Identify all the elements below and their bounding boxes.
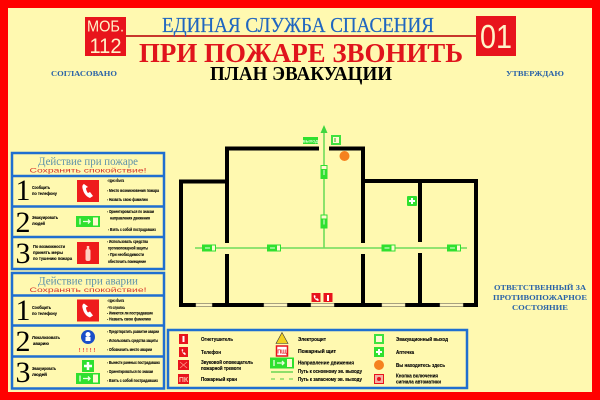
legend: you are here (374, 360, 445, 370)
panel heading: Сохранять спокойствие! (30, 166, 147, 174)
panel heading (30, 156, 147, 174)
step 2: contain the emergency: 2 (16, 325, 30, 358)
legend: reserve exit route (271, 377, 362, 383)
step 3: try to extinguish: 3 (16, 237, 30, 270)
step 3: try to extinguish: обесточить помещение (108, 258, 146, 265)
step 2: evacuate people: направления движения (110, 216, 150, 222)
step 2: contain the emergency: - Обозначить место аварии (107, 346, 152, 353)
step 1: report by phone: - Что случилось (107, 305, 125, 311)
legend: emergency exit (374, 334, 449, 344)
step 2: contain the emergency: !!!!! (79, 348, 97, 354)
legend: you are here: Вы находитесь здесь (396, 363, 445, 369)
walls (179, 146, 478, 307)
legend: direction of movement (270, 358, 354, 368)
step 3: evacuate people: Эвакуировать (32, 366, 56, 372)
legend: automatic alarm button (374, 374, 441, 386)
legend: main exit route: Путь к основному эв. выходу (298, 369, 362, 375)
legend: fire alarm sounder: Звуковой оповещатель (201, 359, 253, 366)
icon: extinguisher on plan (324, 293, 332, 302)
panel heading: Сохранять спокойствие! (30, 286, 147, 294)
label: approved: УТВЕРЖДАЮ (506, 69, 565, 78)
floor plan (179, 125, 478, 307)
legend: electrical panel (276, 332, 326, 344)
legend: fire alarm sounder: пожарной тревоги (201, 365, 241, 372)
legend: fire board (276, 346, 336, 356)
step 3: try to extinguish: - При необходимости (108, 251, 144, 258)
step 3: try to extinguish (16, 237, 148, 270)
step 1: report by phone: - Место возникновения пожара (107, 188, 159, 194)
exit label sign: ВЫХОД (303, 138, 318, 143)
step 1: report by phone: 1 (16, 174, 30, 207)
icon: phone on plan (312, 293, 320, 302)
legend: fire hydrant: Пожарный кран (201, 376, 237, 383)
heading: call in case of fire: ПРИ ПОЖАРЕ ЗВОНИТЬ (139, 38, 463, 68)
legend: extinguisher (179, 334, 233, 344)
legend: reserve exit route: Путь к запасному эв. выходу (298, 377, 362, 383)
step 1: report by phone: - Адрес объекта (107, 297, 124, 304)
badge: mobile 112: 112 (90, 35, 122, 58)
header rule (126, 35, 476, 37)
panel heading (30, 276, 147, 294)
legend: first aid (374, 347, 414, 357)
route signs (202, 165, 461, 252)
step 2: evacuate people (16, 206, 156, 239)
badge: mobile 112: МОБ. (87, 18, 124, 36)
step 2: contain the emergency (16, 325, 159, 358)
legend: main exit route (271, 369, 362, 375)
icon: emergency exit (331, 135, 341, 145)
text block: responsible for fire safety: ПРОТИВОПОЖАРНОЕ (493, 293, 587, 302)
legend: first aid: Аптечка (396, 350, 414, 356)
legend: automatic alarm button: Кнопка включения (396, 374, 438, 380)
text block: responsible for fire safety (493, 283, 587, 312)
legend: emergency exit: Эвакуационный выход (396, 336, 449, 343)
panel: actions in case of fire (12, 153, 164, 270)
legend: fire hydrant (178, 374, 237, 384)
legend: phone: Телефон (201, 349, 221, 356)
legend: fire board: ПЩ (277, 350, 287, 356)
icon: you are here (340, 151, 350, 161)
step 1: report by phone: по телефону (32, 310, 57, 317)
panel heading: Действие при пожаре (38, 156, 138, 168)
heading: unified rescue service: ЕДИНАЯ СЛУЖБА СПАСЕНИЯ (162, 13, 434, 37)
text block: responsible for fire safety: ОТВЕТСТВЕННЫЙ ЗА (494, 283, 587, 292)
step 2: evacuate people: - Взять с собой пострадавших (108, 226, 156, 233)
step 2: contain the emergency: - Предотвратить развитие аварии (107, 329, 159, 335)
step 3: evacuate people: людей (32, 371, 47, 378)
windows (196, 304, 463, 306)
text block: responsible for fire safety: СОСТОЯНИЕ (512, 303, 568, 312)
step 3: evacuate people: - Ориентироваться по знакам (107, 369, 153, 375)
step 2: contain the emergency: Локализовать (32, 335, 60, 341)
step 1: report by phone (16, 294, 153, 327)
legend (168, 330, 467, 388)
heading: evacuation plan: ПЛАН ЭВАКУАЦИИ (210, 64, 392, 85)
legend: automatic alarm button: сигнала автоматики (396, 380, 441, 386)
legend: fire board: Пожарный щит (298, 348, 336, 355)
icon: first aid (407, 196, 417, 206)
step 1: report by phone: - Адрес объекта (107, 177, 124, 184)
step 3: evacuate people: 3 (16, 356, 30, 389)
step 3: try to extinguish: По возможности (33, 244, 65, 250)
step 2: evacuate people: - Ориентироваться по знакам (107, 209, 154, 215)
step 3: evacuate people: - Взять с собой пострадавших (107, 377, 158, 384)
step 2: evacuate people: Эвакуировать (32, 215, 58, 221)
legend: electrical panel: Электрощит (298, 337, 326, 343)
badge: mobile 112 (85, 17, 126, 58)
step 1: report by phone: - Назвать свою фамилию (107, 196, 148, 203)
panel heading: Действие при аварии (38, 276, 138, 288)
step 2: evacuate people: 2 (16, 206, 30, 239)
badge: 01: 01 (480, 18, 512, 55)
legend: direction of movement: Направление движения (298, 360, 354, 366)
header (51, 13, 565, 85)
step 2: contain the emergency: - Использовать средства защиты (107, 338, 158, 344)
step 3: evacuate people: - Вынести раненых пострадавших (107, 360, 160, 366)
legend: fire hydrant: ПК (179, 377, 189, 384)
evacuation route (195, 125, 467, 248)
legend: fire alarm sounder (178, 359, 253, 372)
label: agreed: СОГЛАСОВАНО (51, 69, 117, 78)
step 1: report by phone: 1 (16, 294, 30, 327)
step 1: report by phone: Сообщить (32, 304, 51, 311)
panel: actions in case of emergency (12, 273, 164, 389)
step 3: try to extinguish: по тушению пожара (33, 257, 72, 262)
step 1: report by phone (16, 174, 159, 207)
step 3: try to extinguish: противопожарной защиты (108, 244, 148, 252)
legend: extinguisher: Огнетушитель (201, 337, 233, 343)
step 1: report by phone: - Назвать свою фамилию (107, 316, 151, 322)
step 3: try to extinguish: принять меры (33, 251, 63, 256)
step 3: evacuate people (16, 356, 160, 389)
step 1: report by phone: по телефону (32, 190, 57, 197)
step 1: report by phone: Сообщить (32, 184, 50, 191)
step 2: evacuate people: людей (32, 220, 45, 227)
step 2: contain the emergency: аварию (33, 342, 49, 347)
step 1: report by phone: - Имеются ли пострадавшие (107, 310, 153, 316)
legend: phone (179, 347, 221, 357)
step 3: try to extinguish: - Использовать средства (107, 239, 148, 245)
